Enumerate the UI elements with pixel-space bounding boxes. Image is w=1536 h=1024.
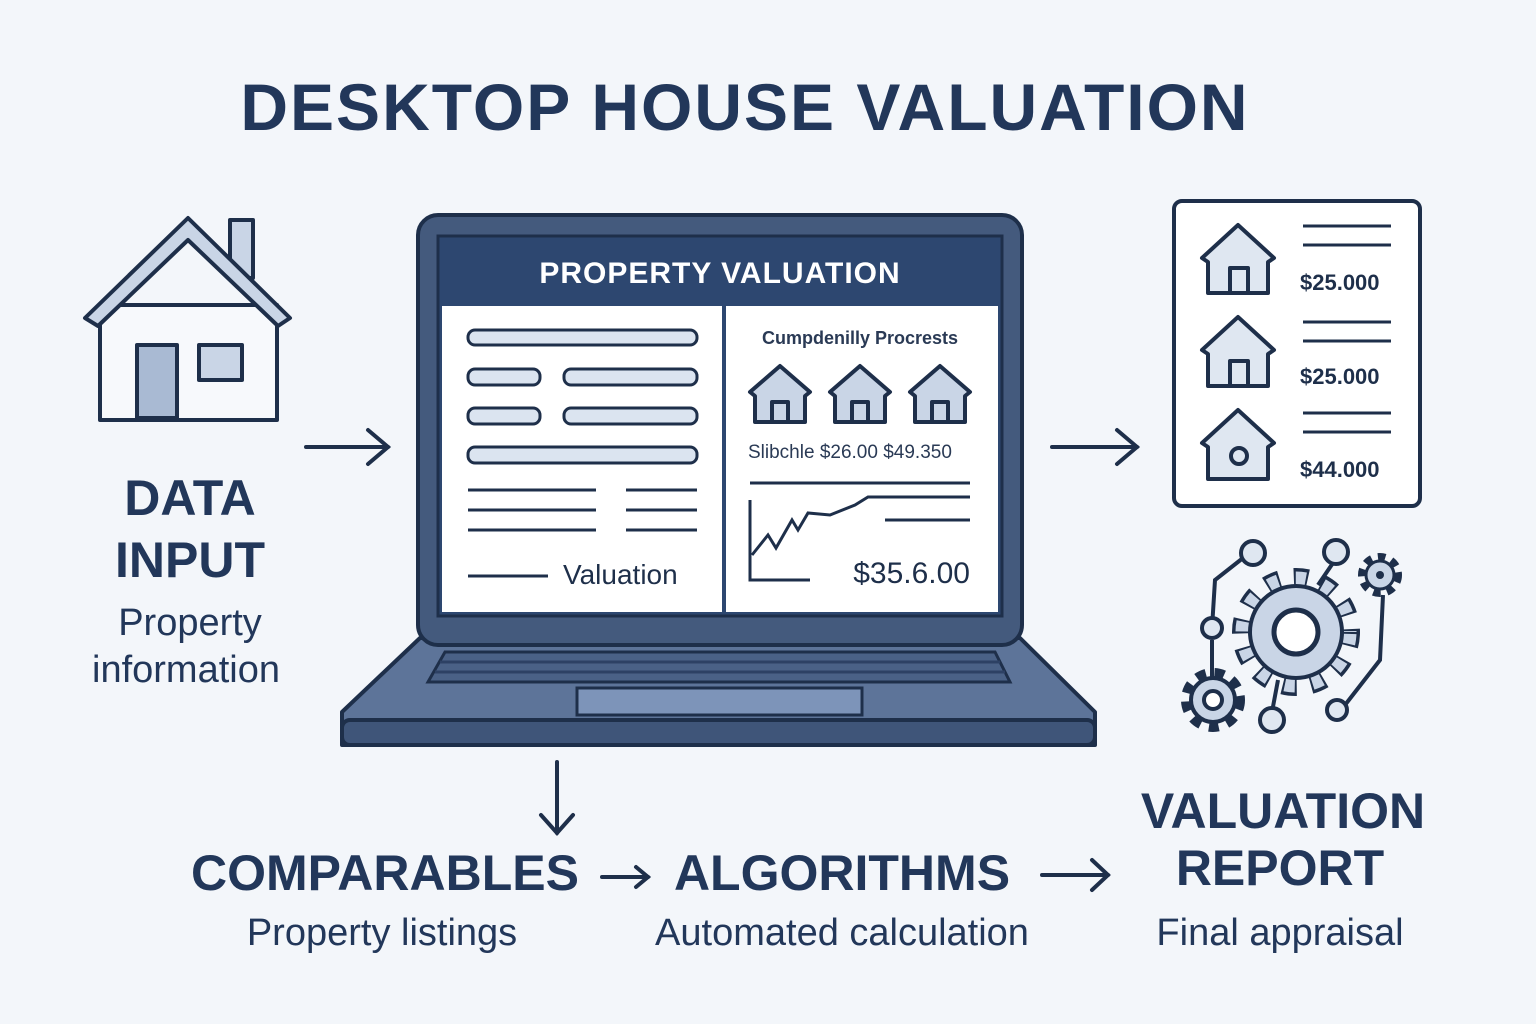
laptop — [342, 215, 1095, 745]
report card — [1174, 201, 1420, 506]
arrow: laptop to report — [1052, 430, 1137, 464]
heading: data input: information — [92, 649, 280, 691]
screen left panel: form — [442, 306, 722, 612]
heading: data input: DATA — [124, 470, 256, 526]
screen header: PROPERTY VALUATION — [539, 257, 901, 290]
screen right panel: comparables: Slibchle $26.00 $49.350 — [748, 442, 952, 463]
icon: gears network — [1188, 540, 1397, 732]
report card: $44.000 — [1300, 457, 1380, 482]
heading: algorithms: ALGORITHMS — [674, 845, 1010, 901]
heading: data input: Property — [118, 602, 262, 644]
heading: comparables — [191, 845, 579, 954]
heading: valuation report: REPORT — [1176, 840, 1384, 896]
heading: comparables: COMPARABLES — [191, 845, 579, 901]
heading: algorithms: Automated calculation — [655, 912, 1029, 954]
heading: comparables: Property listings — [247, 912, 517, 954]
heading: valuation report: Final appraisal — [1156, 912, 1404, 954]
heading: data input: INPUT — [115, 532, 265, 588]
report card: $25.000 — [1300, 270, 1380, 295]
screen right panel: comparables — [726, 306, 998, 612]
arrow: comparables to algorithms — [602, 867, 648, 887]
arrow: input to laptop — [306, 430, 388, 464]
arrow: laptop down — [541, 762, 573, 833]
screen right panel: comparables: $35.6.00 — [853, 557, 970, 590]
heading: data input — [92, 470, 280, 691]
arrow: algorithms to report — [1042, 860, 1108, 890]
report card: $25.000 — [1300, 364, 1380, 389]
icon: house — [85, 218, 290, 420]
heading: valuation report: VALUATION — [1141, 783, 1425, 839]
heading: algorithms — [655, 845, 1029, 954]
screen left panel: form: Valuation — [563, 559, 678, 590]
heading: valuation report — [1141, 783, 1425, 954]
screen right panel: comparables: Cumpdenilly Procrests — [762, 328, 958, 348]
title: DESKTOP HOUSE VALUATION — [240, 70, 1250, 144]
